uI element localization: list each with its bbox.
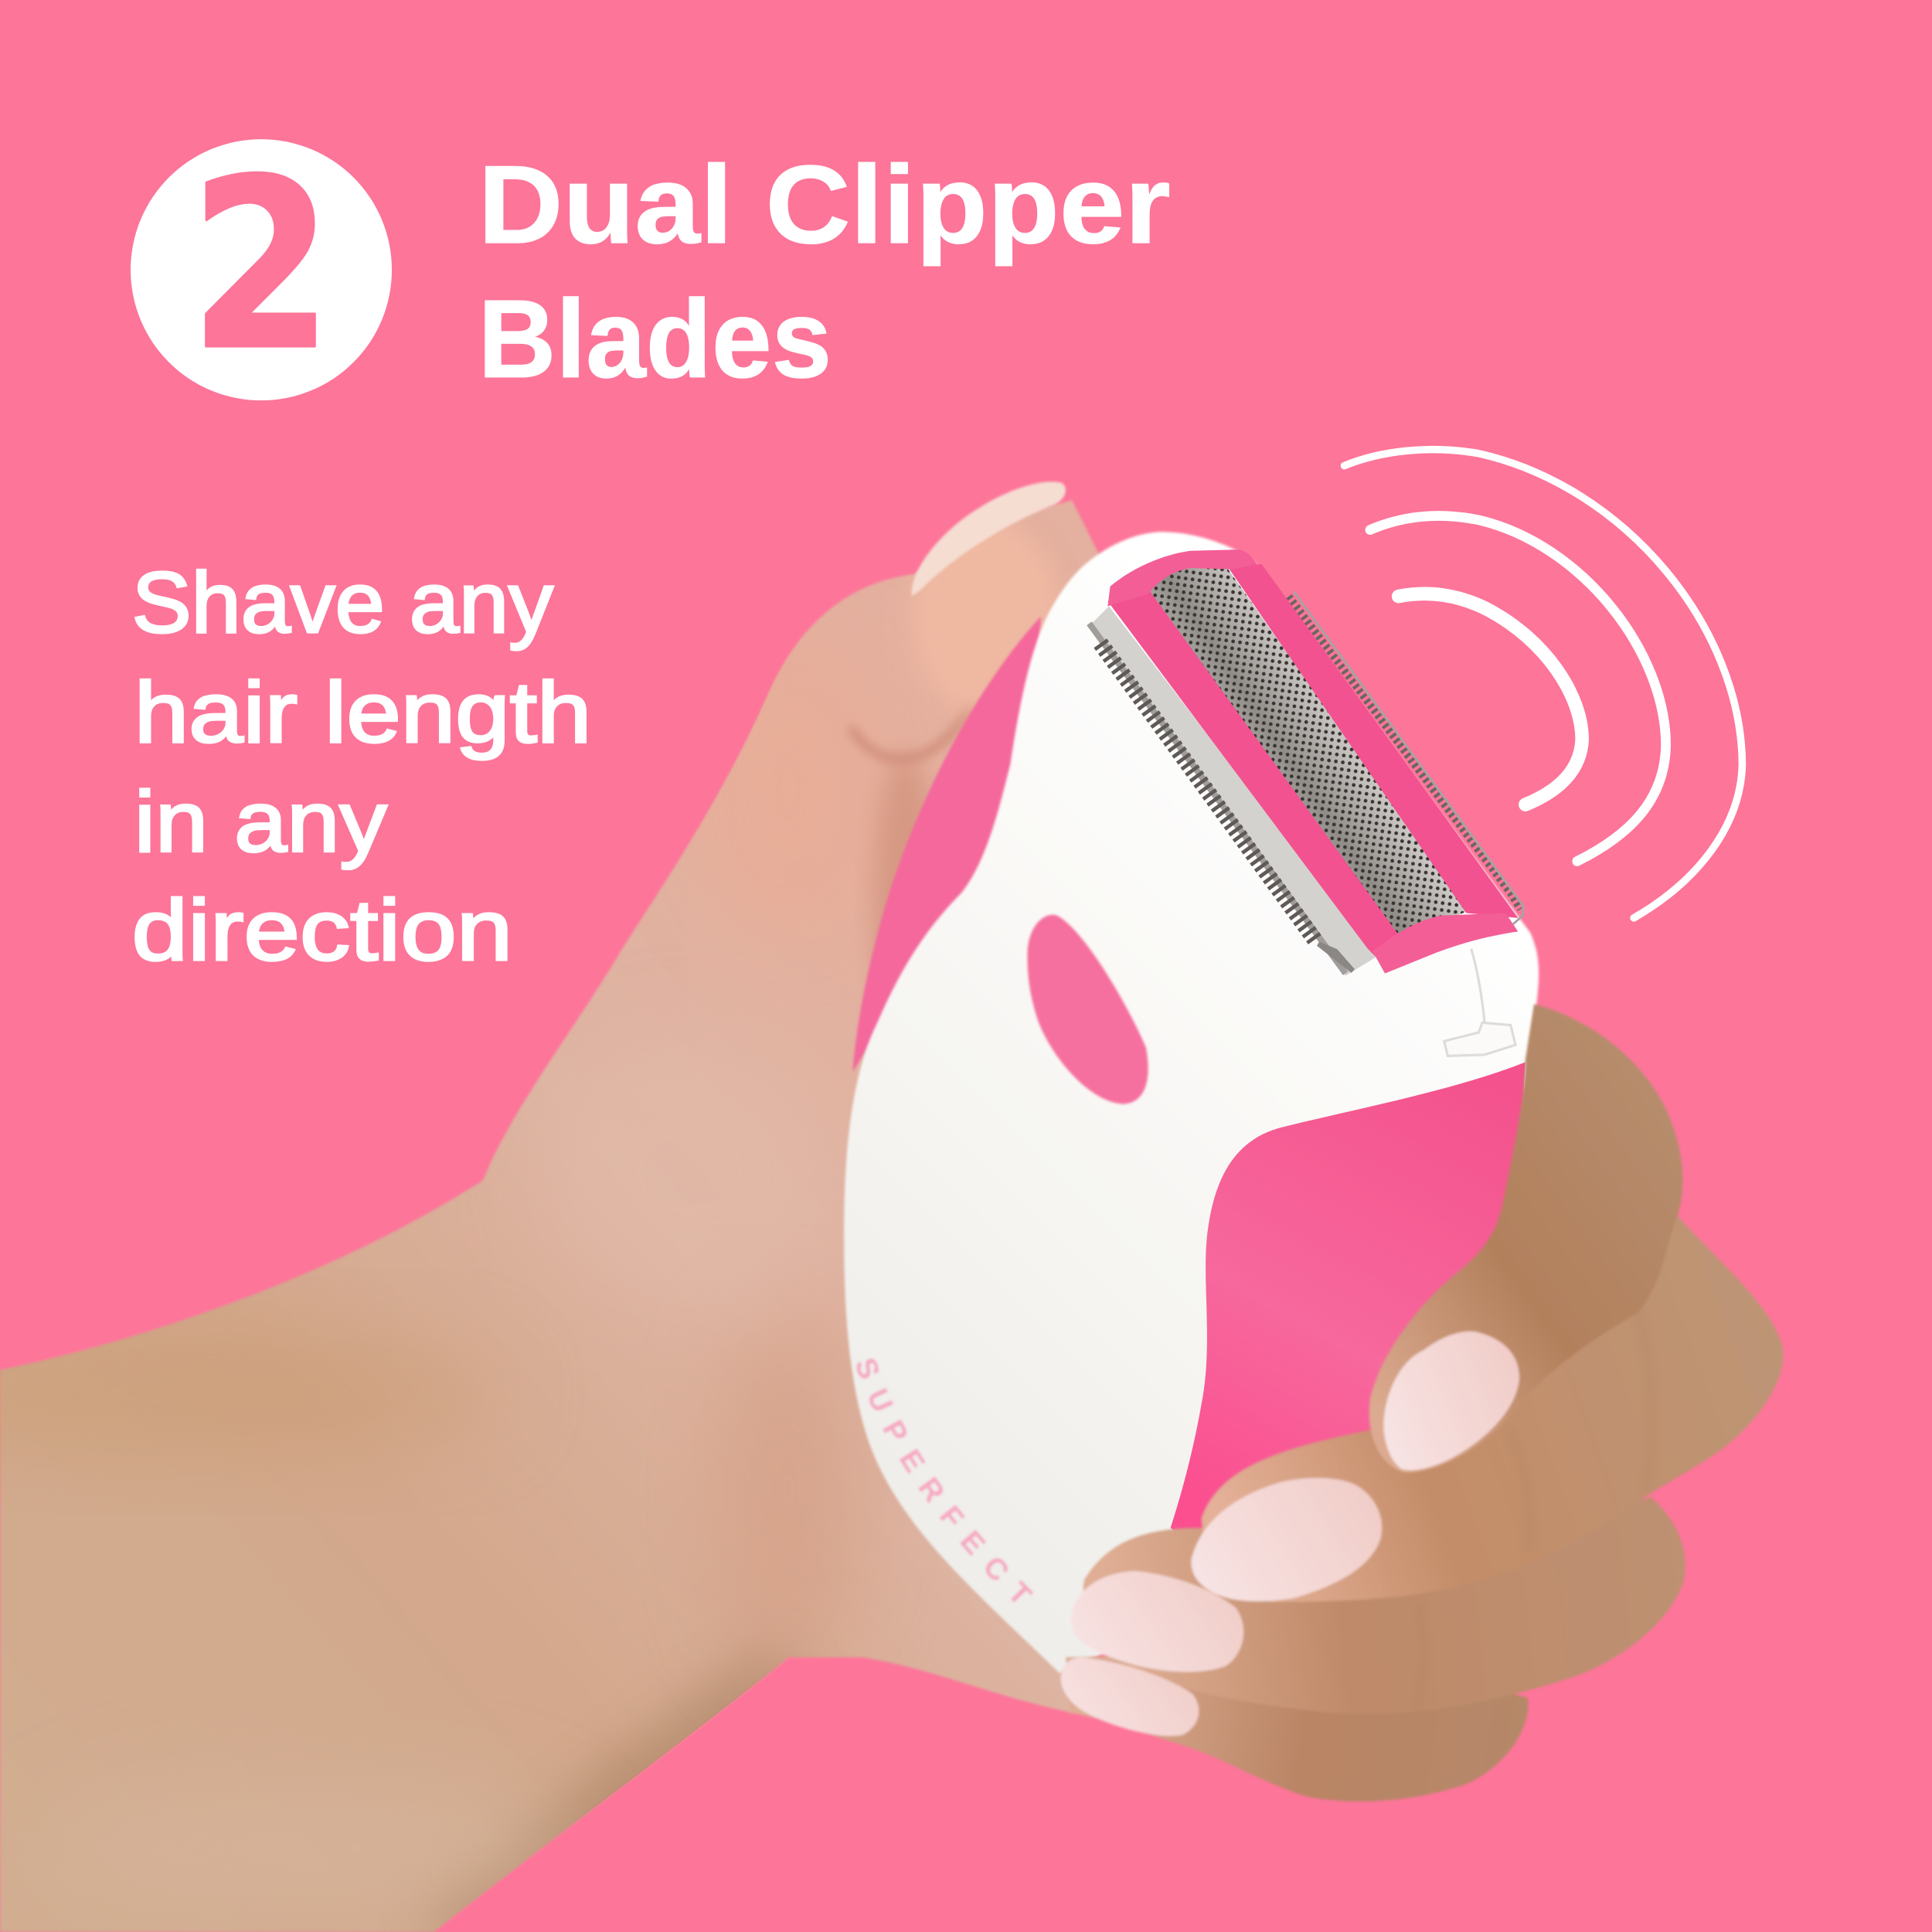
icon: vibration waves — [1344, 450, 1742, 918]
number badge — [131, 130, 392, 402]
finger creases — [1417, 1312, 1651, 1710]
hand and arm — [0, 481, 1109, 1932]
title: Blades — [478, 277, 832, 401]
ring fingernail — [1070, 1571, 1243, 1672]
perforated foil — [1148, 566, 1469, 937]
number badge: 2 — [190, 130, 332, 402]
device white body — [844, 532, 1539, 1673]
little finger — [1066, 1651, 1529, 1801]
device pink button — [1027, 915, 1148, 1104]
middle fingernail — [1192, 1478, 1382, 1601]
description text — [132, 554, 591, 978]
icon: thumb nail — [912, 481, 1066, 597]
description text: hair length — [134, 664, 591, 760]
right clipper comb — [1289, 591, 1523, 924]
head latch — [1444, 949, 1515, 1056]
index finger — [1369, 1004, 1682, 1472]
index fingernail — [1383, 1332, 1519, 1470]
device pink grip — [1171, 1062, 1526, 1590]
description text: direction — [132, 882, 512, 978]
fingers — [1061, 1004, 1783, 1801]
ring finger — [1083, 1497, 1685, 1714]
brand text on device: SUPERFECT — [855, 1357, 1034, 1603]
description text: in any — [134, 774, 387, 870]
device left pink side — [852, 616, 1041, 1072]
title — [478, 143, 1171, 401]
device: shaver — [842, 530, 1541, 1674]
little fingernail — [1061, 1658, 1199, 1736]
title: Dual Clipper — [478, 143, 1171, 267]
left clipper comb — [1089, 606, 1378, 976]
description text: Shave any — [132, 554, 553, 651]
middle finger — [1202, 1213, 1783, 1602]
pink guard frame — [1107, 549, 1518, 974]
